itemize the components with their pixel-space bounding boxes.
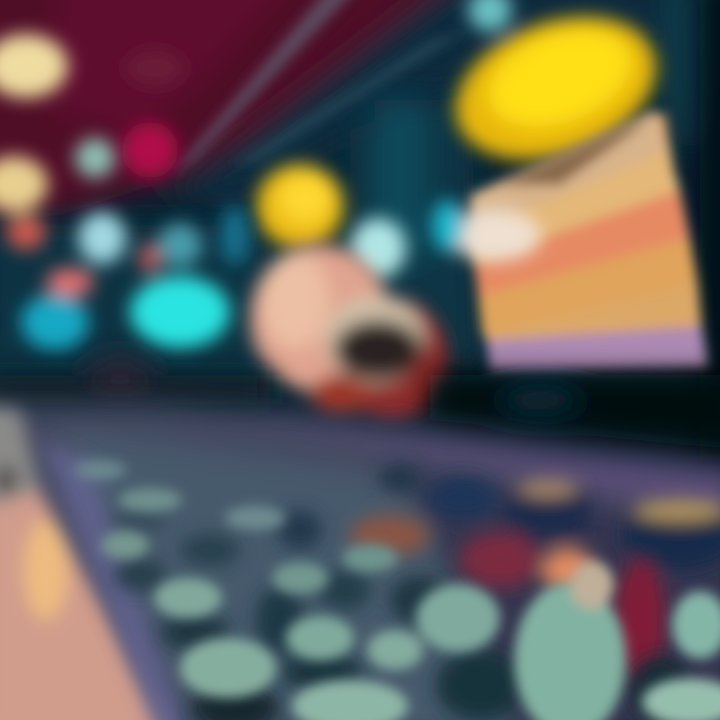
ceiling lights: crimson spot — [122, 50, 185, 178]
ceiling: crimson — [0, 0, 720, 225]
circular sign — [250, 244, 448, 420]
lamp: large yellow — [436, 0, 676, 186]
glow: white teal light by panel — [432, 200, 541, 261]
console shadows: dark wells — [114, 508, 690, 720]
lamp: small yellow — [256, 164, 344, 248]
console buttons: rear row — [350, 464, 720, 680]
console: purple edge — [40, 440, 190, 720]
right wall: dark side — [0, 0, 720, 460]
ceiling beam: grey stripe — [170, 0, 470, 175]
lights: cyan glow — [21, 205, 406, 350]
lamps: ceiling left — [0, 34, 115, 250]
screen: striped panel — [470, 110, 708, 372]
floor strip: peach walkway — [0, 405, 170, 720]
floor band: dark horizon — [0, 355, 720, 450]
floor: console surface — [0, 405, 720, 720]
console buttons: mint knobs — [74, 460, 720, 720]
